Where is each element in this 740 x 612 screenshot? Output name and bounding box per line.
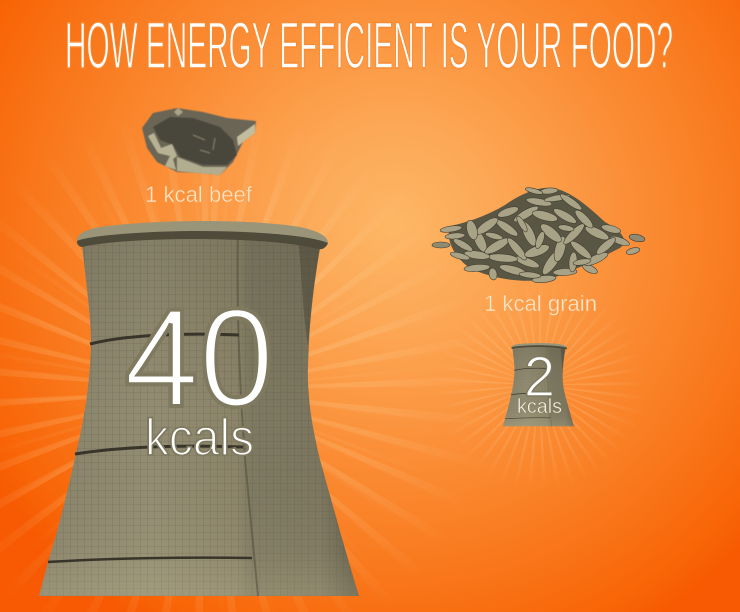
secondary rays behind big tower [36,291,349,480]
label: 1 kcal beef: 1 kcal beef [145,182,253,207]
small cooling tower [503,343,574,426]
sunburst rays behind big tower [0,164,436,612]
icon: beef steak [142,108,256,175]
unit: kcals: kcals [517,396,562,418]
number: 40: 40 [124,279,274,436]
unit: kcals: kcals [145,409,254,467]
big cooling tower [39,221,359,596]
number: 2: 2 [524,345,555,409]
label: 1 kcal grain: 1 kcal grain [484,291,597,316]
icon: grain pile [432,186,646,284]
sunburst rays behind small tower [455,302,627,473]
